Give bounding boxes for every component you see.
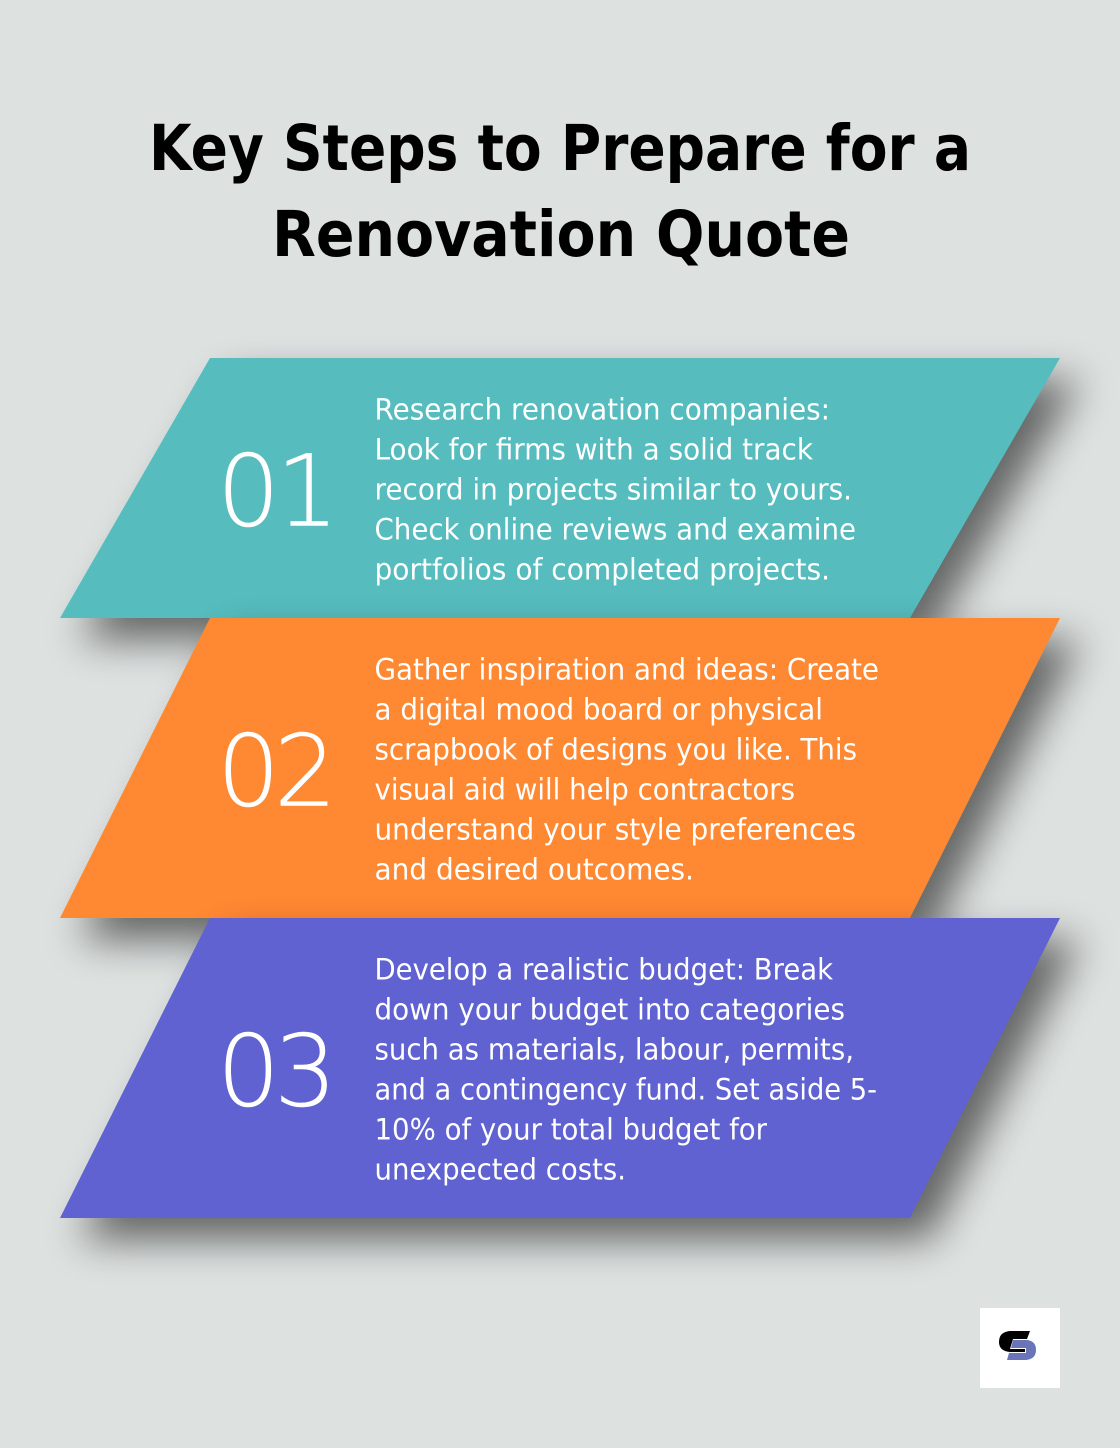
title: Key Steps to Prepare for a (149, 112, 971, 185)
step 2 background (60, 618, 1060, 918)
step 3 text (374, 952, 877, 1186)
step 2 text: visual aid will help contractors (374, 772, 795, 806)
step 2 text (374, 652, 879, 886)
step 2 text: understand your style preferences (374, 812, 856, 846)
panel: step 2 inspiration (60, 618, 1060, 918)
panel: step 3 budget (60, 918, 1060, 1218)
step 1 text (374, 392, 856, 586)
step 1 text: Look for firms with a solid track (374, 432, 813, 466)
step 2 text: and desired outcomes. (374, 852, 694, 886)
step 2 text: Gather inspiration and ideas: Create (374, 652, 879, 686)
logo mark upper (999, 1331, 1030, 1352)
step 3 text: 10% of your total budget for (374, 1112, 768, 1146)
step 1 number: 01 (217, 434, 339, 550)
title: Renovation Quote (272, 198, 850, 271)
step 1 text: Check online reviews and examine (374, 512, 856, 546)
step 3 text: and a contingency fund. Set aside 5- (374, 1072, 877, 1106)
step 1 text: Research renovation companies: (374, 392, 830, 426)
step 2 text: scrapbook of designs you like. This (374, 732, 857, 766)
panel: step 1 research (60, 358, 1060, 618)
step 3 text: Develop a realistic budget: Break (374, 952, 833, 986)
step 3 text: unexpected costs. (374, 1152, 626, 1186)
logo (980, 1308, 1060, 1388)
step 3 text: such as materials, labour, permits, (374, 1032, 854, 1066)
step 2 number: 02 (217, 714, 337, 830)
title (149, 112, 971, 271)
step 2 text: a digital mood board or physical (374, 692, 823, 726)
step 1 text: record in projects similar to yours. (374, 472, 852, 506)
step 1 background (60, 358, 1060, 618)
step 3 text: down your budget into categories (374, 992, 845, 1026)
step 3 number: 03 (217, 1014, 337, 1130)
logo mark lower (1007, 1340, 1036, 1360)
step 3 background (60, 918, 1060, 1218)
step 1 text: portfolios of completed projects. (374, 552, 830, 586)
